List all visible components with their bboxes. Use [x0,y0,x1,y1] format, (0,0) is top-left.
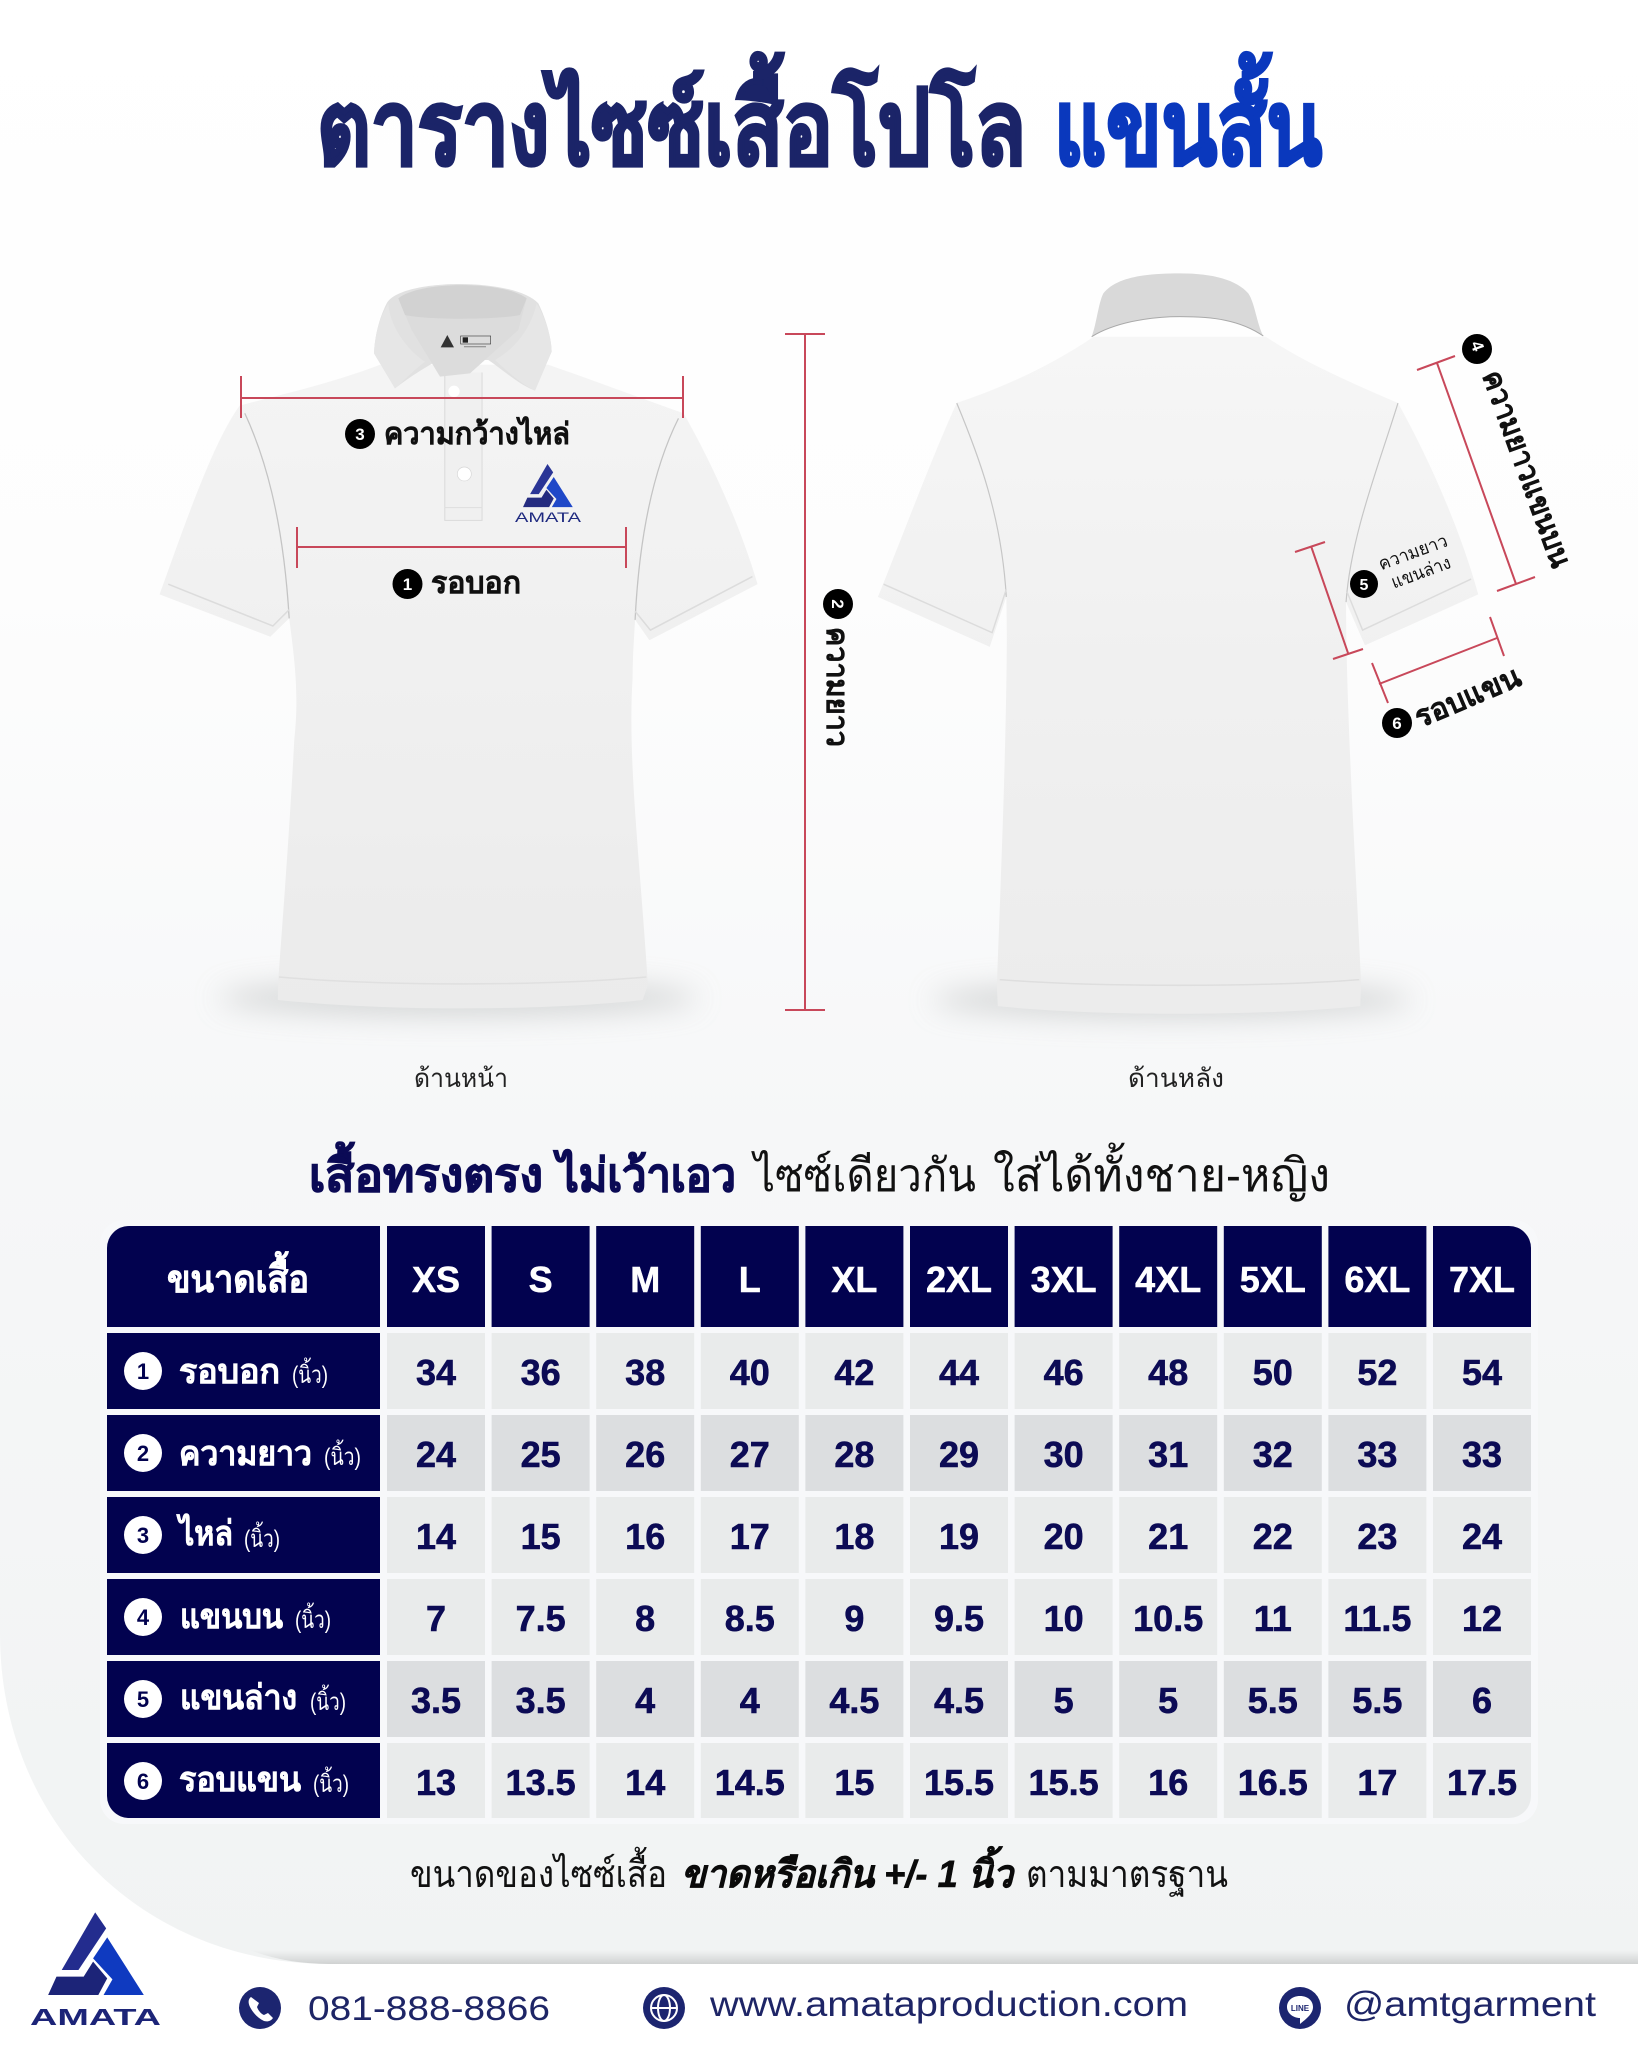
contact: line [1279,1985,1596,2029]
caption: front: ด้านหน้า [414,1063,508,1093]
table header row: 5XL [1240,1259,1306,1300]
row 3: shoulder: ไหล่ [176,1513,233,1553]
subtitle [309,1141,1330,1201]
row 4: upper sleeve: แขนบน [180,1598,283,1636]
row 5: lower sleeve: 5 [1054,1680,1074,1721]
measure line 6: sleeve opening: 6 [1392,714,1402,733]
measure line 4: upper sleeve length: 4 [1467,338,1488,354]
measure line 5: lower sleeve length: ความยาว [1376,531,1450,574]
row 3: shoulder [107,1497,1531,1573]
measure line 4: upper sleeve length [1417,334,1577,591]
row 4: upper sleeve: 7 [426,1598,446,1639]
row 3: shoulder: 16 [625,1516,665,1557]
contact: phone [239,1987,550,2029]
contact: website [643,1985,1188,2029]
contact: phone: 081-888-8866 [308,1990,550,2028]
footer logo: AMATA [30,2004,161,2030]
measure line 3: shoulder width: 3 [355,425,365,444]
row 1: chest: 48 [1148,1352,1188,1393]
row 3: shoulder: 24 [1462,1516,1502,1557]
row 4: upper sleeve: 12 [1462,1598,1502,1639]
footnote text: ตามมาตรฐาน [1026,1854,1228,1897]
row 1: chest [107,1333,1531,1409]
footnote text [410,1846,1228,1897]
subtitle: ไซซ์เดียวกัน [750,1149,976,1201]
row 4: upper sleeve: 9 [844,1598,864,1639]
size table [100,1220,1538,1824]
illustration: polo shirt back [878,273,1478,1018]
measure line 6: sleeve opening [1372,617,1526,738]
row 5: lower sleeve: 4 [740,1680,760,1721]
measure line 4: upper sleeve length: ความยาวแขนบน [1475,366,1577,572]
row 1: chest: 40 [730,1352,770,1393]
row 1: chest: 36 [521,1352,561,1393]
row 3: shoulder: 14 [416,1516,456,1557]
measure line 1: chest [297,527,626,600]
row 2: length: 29 [939,1434,979,1475]
row 6: sleeve opening: 17.5 [1447,1762,1517,1803]
measure line 5: lower sleeve length: แขนล่าง [1388,552,1453,592]
table header row: M [630,1259,660,1300]
measure line 5: lower sleeve length: 5 [1360,577,1369,594]
row 5: lower sleeve: 3.5 [516,1680,566,1721]
row 5: lower sleeve: 5.5 [1352,1680,1402,1721]
row 6: sleeve opening: 17 [1357,1762,1397,1803]
table header row: ขนาดเสื้อ [167,1251,309,1301]
row 5: lower sleeve: 4.5 [934,1680,984,1721]
row 3: shoulder: 22 [1253,1516,1293,1557]
measure line 1: chest: รอบอก [431,567,521,600]
row 6: sleeve opening: รอบแขน [179,1761,301,1799]
row 2: length: 33 [1357,1434,1397,1475]
measure line 2: length [785,334,853,1010]
contact: line: LINE [1291,2004,1310,2013]
row 2: length: ความยาว [179,1435,312,1473]
row 2: length: 2 [137,1441,149,1466]
contact: website: www.amataproduction.com [709,1985,1188,2024]
row 3: shoulder: (นิ้ว) [244,1521,280,1553]
row 4: upper sleeve: (นิ้ว) [295,1602,331,1634]
row 6: sleeve opening: 13 [416,1762,456,1803]
row 3: shoulder: 23 [1357,1516,1397,1557]
table header row: L [739,1259,761,1300]
subtitle: เสื้อทรงตรง [309,1141,543,1201]
subtitle: ใส่ได้ทั้งชาย-หญิง [993,1142,1330,1201]
row 5: lower sleeve: 3.5 [411,1680,461,1721]
row 6: sleeve opening: 16 [1148,1762,1188,1803]
row 4: upper sleeve: 10 [1044,1598,1084,1639]
row 2: length: 28 [834,1434,874,1475]
table header row [107,1226,1531,1327]
measure line 3: shoulder width [241,376,683,451]
row 2: length: 26 [625,1434,665,1475]
row 4: upper sleeve: 4 [137,1605,150,1630]
row 1: chest: รอบอก [179,1353,280,1391]
caption: back: ด้านหลัง [1128,1063,1224,1093]
row 3: shoulder: 20 [1044,1516,1084,1557]
row 5: lower sleeve: แขนล่าง [180,1679,297,1717]
measure line 2: length: 2 [828,599,847,609]
row 2: length: 24 [416,1434,456,1475]
title: ตารางไซซ์เสื้อโปโล [317,52,1026,187]
table header row: S [529,1259,553,1300]
row 2: length: 25 [521,1434,561,1475]
row 3: shoulder: 19 [939,1516,979,1557]
measure line 6: sleeve opening: รอบแขน [1410,660,1526,734]
row 2: length: 30 [1044,1434,1084,1475]
illustration: polo shirt front [160,284,758,1016]
row 1: chest: 54 [1462,1352,1502,1393]
title: แขนสั้น [1054,52,1322,187]
row 6: sleeve opening: 13.5 [506,1762,576,1803]
row 1: chest: 42 [834,1352,874,1393]
row 6: sleeve opening: 15.5 [1029,1762,1099,1803]
row 1: chest: 38 [625,1352,665,1393]
measure line 1: chest: 1 [403,575,412,594]
row 5: lower sleeve: 4.5 [829,1680,879,1721]
row 2: length: 31 [1148,1434,1188,1475]
row 6: sleeve opening: (นิ้ว) [313,1766,349,1798]
row 4: upper sleeve: 10.5 [1133,1598,1203,1639]
row 4: upper sleeve: 7.5 [516,1598,566,1639]
table header row: 6XL [1344,1259,1410,1300]
icon: chest logo [515,464,582,525]
row 1: chest: 34 [416,1352,456,1393]
row 1: chest: 46 [1044,1352,1084,1393]
row 6: sleeve opening: 6 [137,1769,149,1794]
table header row: 7XL [1449,1259,1515,1300]
row 4: upper sleeve: 8 [635,1598,655,1639]
row 2: length [107,1415,1531,1491]
row 2: length: 32 [1253,1434,1293,1475]
row 6: sleeve opening: 14.5 [715,1762,785,1803]
row 6: sleeve opening: 14 [625,1762,665,1803]
row 4: upper sleeve [107,1579,1531,1655]
row 1: chest: 50 [1253,1352,1293,1393]
subtitle: ไม่เว้าเอว [552,1149,736,1201]
footnote text: ขาดหรือเกิน +/- 1 นิ้ว [681,1846,1016,1896]
row 6: sleeve opening [107,1743,1531,1818]
table header row: 3XL [1031,1259,1097,1300]
table header row: 4XL [1135,1259,1201,1300]
row 3: shoulder: 21 [1148,1516,1188,1557]
row 3: shoulder: 3 [137,1523,149,1548]
row 1: chest: 44 [939,1352,979,1393]
row 2: length: (นิ้ว) [324,1439,361,1471]
measure line 2: length: ความยาว [820,627,853,747]
row 2: length: 27 [730,1434,770,1475]
row 5: lower sleeve [107,1661,1531,1737]
row 3: shoulder: 17 [730,1516,770,1557]
row 5: lower sleeve: 5 [137,1687,149,1712]
row 6: sleeve opening: 16.5 [1238,1762,1308,1803]
measure line 3: shoulder width: ความกว้างไหล่ [384,416,570,451]
row 4: upper sleeve: 8.5 [725,1598,775,1639]
row 4: upper sleeve: 9.5 [934,1598,984,1639]
row 2: length: 33 [1462,1434,1502,1475]
row 6: sleeve opening: 15 [834,1762,874,1803]
row 5: lower sleeve: (นิ้ว) [310,1684,346,1716]
row 6: sleeve opening: 15.5 [924,1762,994,1803]
row 4: upper sleeve: 11.5 [1343,1598,1411,1639]
row 5: lower sleeve: 5.5 [1248,1680,1298,1721]
measure line 5: lower sleeve length [1295,531,1453,659]
row 4: upper sleeve: 11 [1254,1598,1292,1639]
table header row: XS [412,1259,460,1300]
row 1: chest: 1 [137,1359,149,1384]
footer logo [30,1912,161,2030]
row 5: lower sleeve: 4 [635,1680,655,1721]
footnote text: ขนาดของไซซ์เสื้อ [410,1846,667,1896]
row 1: chest: (นิ้ว) [292,1357,328,1389]
table header row: 2XL [926,1259,992,1300]
row 1: chest: 52 [1357,1352,1397,1393]
contact: line: @amtgarment [1344,1985,1596,2024]
icon: chest logo: AMATA [515,509,582,525]
table header row: XL [831,1259,877,1300]
row 5: lower sleeve: 6 [1472,1680,1492,1721]
row 3: shoulder: 15 [521,1516,561,1557]
row 5: lower sleeve: 5 [1158,1680,1178,1721]
row 3: shoulder: 18 [834,1516,874,1557]
